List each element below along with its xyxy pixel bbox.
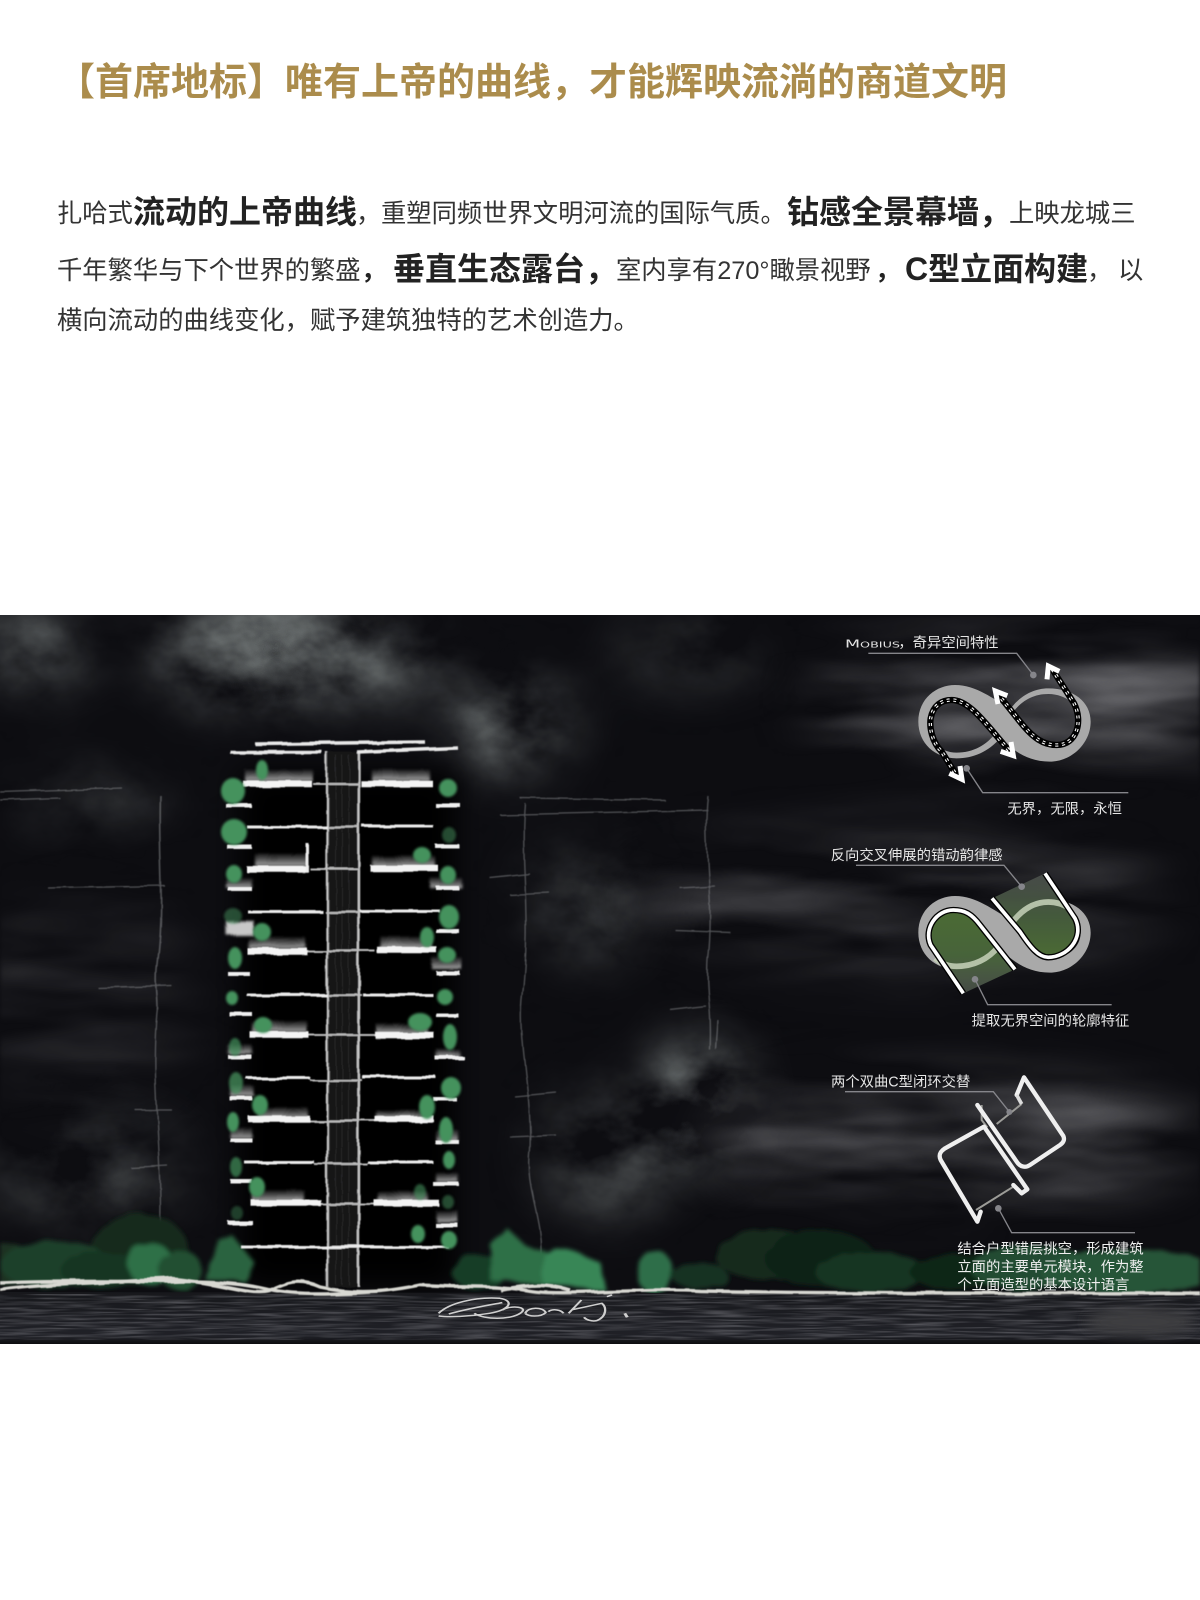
architect signature — [439, 1295, 627, 1321]
paragraph line 1: 扎哈式 — [57, 200, 133, 228]
leader bottom with label — [963, 765, 1128, 818]
ground light patch — [1085, 1308, 1195, 1336]
paragraph line 2: C型立面构建 — [905, 251, 1088, 287]
thin floor plates — [241, 826, 449, 1247]
paragraph line 2: 以 — [1118, 257, 1143, 285]
paragraph line 2: 室内享有270°瞰景视野 — [616, 257, 871, 285]
intro paragraph — [57, 194, 1143, 335]
leader bottom with label: 结合户型错层挑空，形成建筑 — [957, 1241, 1144, 1258]
leader top with label: 反向交叉伸展的错动韵律感 — [831, 846, 1003, 864]
upper loop tab — [1017, 1095, 1022, 1104]
paragraph line 1 — [57, 194, 1136, 230]
side balconies — [226, 805, 464, 1225]
tower core — [327, 752, 359, 1287]
upper loop — [977, 1077, 1064, 1167]
ground line — [0, 1279, 1200, 1294]
thin connecting strips — [976, 1104, 1022, 1210]
infinity ribbon — [918, 685, 1091, 762]
tower sketch — [226, 742, 464, 1287]
roof lines — [230, 742, 458, 752]
infinity ribbon — [918, 896, 1091, 973]
paragraph line 1: 重塑同频世界文明河流的国际气质。 — [381, 200, 786, 228]
translucent green panels — [929, 873, 1078, 993]
leader bottom with label — [972, 976, 1129, 1030]
leader bottom with label — [957, 1205, 1144, 1293]
tower trees — [221, 760, 461, 1249]
pale inner band — [935, 902, 1069, 966]
diagram 1: Mobius infinity ribbon — [845, 635, 1128, 818]
leader top with label — [831, 846, 1025, 890]
leader top with label — [831, 1073, 1012, 1115]
diagram 2: green outlined infinity — [831, 846, 1129, 1030]
paragraph line 1: 流动的上帝曲线 — [133, 194, 357, 230]
ground texture — [0, 1294, 1200, 1340]
black backdrop behind tower — [240, 772, 455, 1287]
storm clouds — [0, 615, 1200, 1234]
leader top with label: Mobius — [845, 637, 900, 650]
ground band — [0, 1292, 1200, 1344]
paragraph line 2: 垂直生态露台， — [393, 251, 617, 287]
thick balcony slabs — [243, 784, 439, 1203]
paragraph line 2 — [57, 251, 1143, 287]
leader bottom with label: 立面的主要单元模块，作为整 — [957, 1258, 1144, 1275]
paragraph line 2: 千年繁华与下个世界的繁盛 — [57, 257, 361, 285]
paragraph line 2: ， — [1087, 257, 1112, 285]
lower loop — [940, 1127, 1027, 1222]
leader bottom with label: 提取无界空间的轮廓特征 — [972, 1013, 1129, 1030]
core connectors — [307, 784, 375, 1204]
dashed flow lines — [930, 668, 1078, 778]
leader top with label: ，奇异空间特性 — [898, 635, 999, 652]
paragraph line 1: 钻感全景幕墙， — [787, 194, 1011, 230]
paragraph line 2: ， — [361, 257, 386, 285]
dark sky background — [0, 615, 1200, 1344]
diagram 3: double C closed loops — [831, 1073, 1144, 1293]
paragraph line 2: ， — [875, 257, 900, 285]
paragraph line 1: 上映龙城三 — [1009, 200, 1136, 228]
leader bottom with label: 个立面造型的基本设计语言 — [957, 1276, 1129, 1293]
title: 【首席地标】唯有上帝的曲线，才能辉映流淌的商道文明 — [57, 62, 1007, 104]
balcony haze — [226, 770, 462, 1222]
left and right faint building sketches — [0, 788, 730, 1285]
panel: architectural sketch on dark background — [0, 615, 1200, 1344]
arrowheads — [949, 666, 1059, 779]
green bushes along ground — [0, 1214, 1200, 1294]
white outlines — [929, 873, 1078, 993]
paragraph line 3: 横向流动的曲线变化，赋予建筑独特的艺术创造力。 — [57, 307, 639, 335]
leader top with label — [845, 635, 1037, 678]
leader top with label: 两个双曲C型闭环交替 — [831, 1073, 970, 1091]
leader bottom with label: 无界，无限，永恒 — [1007, 801, 1122, 818]
paragraph line 1: ， — [356, 200, 381, 228]
